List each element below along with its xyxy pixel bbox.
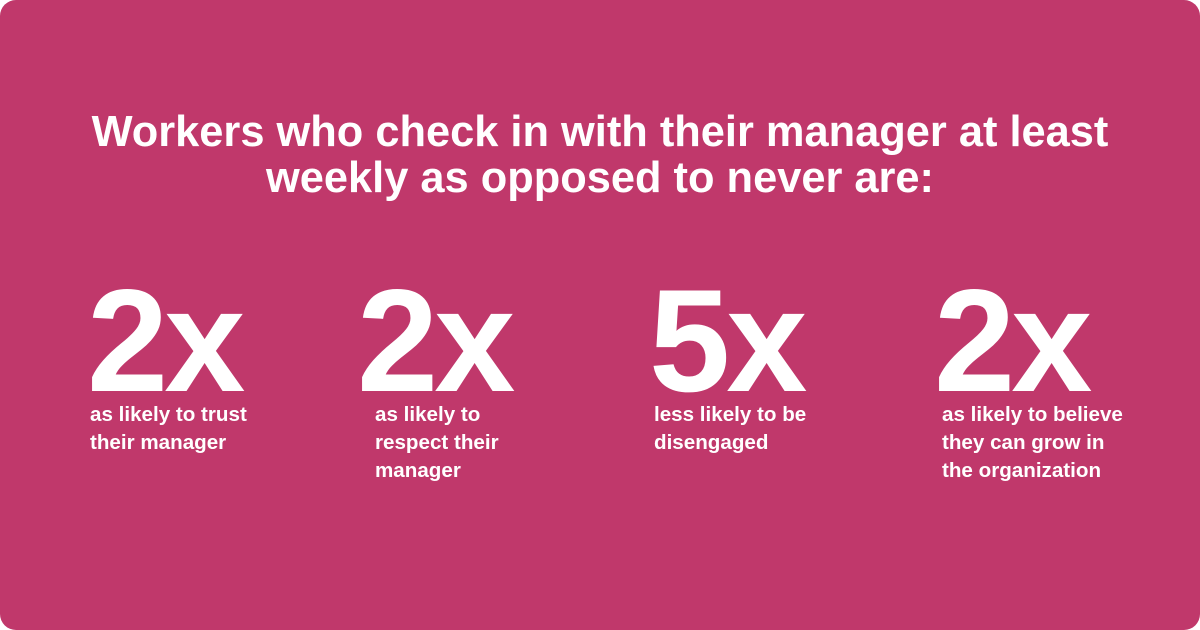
label: less likely to be bbox=[654, 403, 806, 426]
title: Workers who check in with their manager at least bbox=[92, 108, 1108, 156]
label: respect their bbox=[375, 431, 499, 454]
label bbox=[90, 403, 247, 454]
label: as likely to bbox=[375, 403, 480, 426]
number 2x: 2x bbox=[357, 259, 511, 422]
label: manager bbox=[375, 459, 461, 482]
number 2x: 2x bbox=[87, 259, 241, 422]
stat: trust bbox=[87, 259, 247, 454]
number 5x: 5x bbox=[649, 259, 803, 422]
title bbox=[92, 108, 1108, 202]
label: disengaged bbox=[654, 431, 768, 454]
label: as likely to believe bbox=[942, 403, 1123, 426]
label: as likely to trust bbox=[90, 403, 247, 426]
number 2x: 2x bbox=[934, 259, 1088, 422]
label bbox=[942, 403, 1123, 482]
stat: respect bbox=[357, 259, 514, 482]
stat: grow bbox=[934, 259, 1123, 482]
label bbox=[375, 403, 499, 482]
label: the organization bbox=[942, 459, 1101, 482]
title: weekly as opposed to never are: bbox=[266, 154, 934, 202]
stat: disengaged bbox=[649, 259, 806, 454]
label: their manager bbox=[90, 431, 226, 454]
label bbox=[654, 403, 806, 454]
label: they can grow in bbox=[942, 431, 1104, 454]
